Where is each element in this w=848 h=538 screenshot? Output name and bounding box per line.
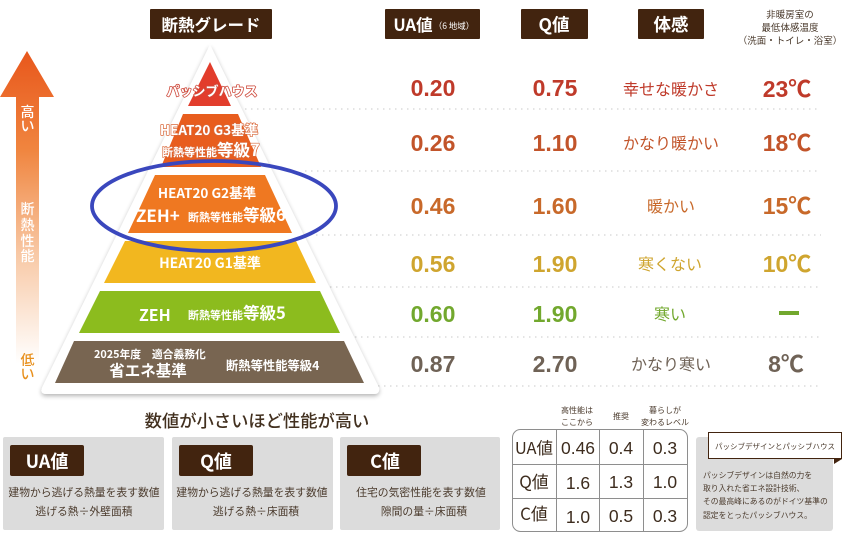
row: energy saving values: かなり寒い: [631, 351, 711, 375]
heading: sensation: [638, 9, 704, 39]
table: recommended values: 1.0: [653, 472, 677, 492]
row: passive house values: [411, 75, 811, 102]
heading: Q value: Q値: [539, 12, 569, 37]
panel: passive design note: 取り入れた省エネ設計技術、: [703, 483, 804, 493]
panel: passive design note: 認定をとったパッシブハウス。: [703, 510, 812, 520]
pyramid tier: HEAT20 G2 and ZEH+: HEAT20 G2基準: [158, 182, 256, 202]
table: recommended values: 1.0: [566, 507, 590, 527]
arrow label: insulation performance: 性: [20, 231, 34, 251]
pyramid tier: ZEH: ZEH: [139, 302, 171, 326]
heading: Q value: [521, 9, 588, 39]
table column headers: 変わるレベル: [641, 417, 689, 428]
arrow label: high: い: [20, 116, 34, 136]
heading: UA value: （6 地域）: [434, 20, 474, 32]
row: G3 values: [411, 130, 811, 156]
row: ZEH values: [411, 301, 799, 327]
heading: lowest sensible temperature: [738, 7, 842, 47]
pyramid tier: energy saving standard: 2025年度 適合義務化: [94, 346, 206, 362]
panel: passive design note: パッシブデザインは自然の力を: [703, 470, 812, 480]
row: G1 values: [411, 251, 811, 277]
row: ZEH values: 1.90: [533, 301, 577, 327]
pyramid tier: HEAT20 G2 and ZEH+: [128, 175, 292, 233]
panel: Q value: 建物から逃げる熱量を表す数値: [176, 484, 328, 500]
pyramid tier: energy saving standard: [55, 341, 364, 383]
row: G2 values: 15℃: [763, 193, 811, 219]
row: G3 values: 1.10: [533, 130, 577, 156]
row: G2 values: 暖かい: [647, 193, 695, 217]
table column headers: ここから: [561, 417, 593, 428]
pyramid tier: passive house: [166, 62, 258, 106]
row: passive house values: 23℃: [763, 76, 811, 102]
panel: C value: C値: [370, 448, 400, 474]
row: passive house values: 0.75: [533, 75, 578, 101]
row: energy saving values: 8℃: [768, 351, 804, 377]
pyramid tier: passive house: パッシブハウス: [166, 81, 258, 100]
table column headers: [561, 405, 689, 428]
row: energy saving values: 0.87: [411, 351, 455, 377]
panel: Q value: Q値: [200, 448, 232, 474]
row: G1 values: 1.90: [533, 251, 577, 277]
heading: insulation grade: 断熱グレード: [162, 12, 260, 36]
pyramid tier: energy saving standard: 省エネ基準: [109, 359, 187, 381]
arrow label: low: い: [20, 364, 34, 384]
table: recommended values: 0.4: [609, 438, 633, 458]
row: ZEH values: 0.60: [411, 301, 455, 327]
pyramid tier: HEAT20 G3: [160, 114, 261, 167]
row: passive house values: 0.20: [411, 75, 455, 101]
table: recommended values: 0.46: [561, 438, 595, 458]
row: G1 values: 寒くない: [638, 251, 702, 275]
panel: C value: 住宅の気密性能を表す数値: [356, 484, 486, 500]
panel: UA value: [3, 437, 164, 530]
table column headers: 高性能は: [561, 405, 593, 416]
table: recommended values: 1.6: [566, 473, 590, 493]
arrow: high to low insulation performance: [0, 51, 54, 384]
row: G1 values: 10℃: [763, 251, 811, 277]
panel: C value: [340, 437, 500, 530]
pyramid tier: HEAT20 G3: HEAT20 G3基準: [160, 119, 258, 139]
pyramid tier: HEAT20 G3: 断熱等性能等級7: [162, 137, 260, 161]
panel: UA value: 逃げる熱÷外壁面積: [35, 503, 133, 519]
row: G2 values: 1.60: [533, 193, 577, 219]
table: recommended values: 0.3: [653, 506, 677, 526]
row: G2 values: 0.46: [411, 193, 455, 219]
row: passive house values: 幸せな暖かさ: [623, 76, 719, 100]
heading: lowest sensible temperature: 最低体感温度: [761, 20, 819, 34]
pyramid tier: HEAT20 G1: [104, 241, 316, 283]
pyramid tier: HEAT20 G1: HEAT20 G1基準: [159, 253, 261, 273]
table: recommended values: Q値: [519, 468, 549, 493]
pyramid tier: ZEH: 断熱等性能等級5: [188, 300, 286, 324]
table column headers: 推奨: [613, 411, 629, 422]
panel: passive design note: その最高峰にあるのがドイツ基準の: [703, 496, 828, 506]
panel: passive design note: パッシブデザインとパッシブハウス: [715, 441, 835, 452]
row: ZEH values: 寒い: [654, 301, 686, 325]
panel: Q value: [172, 437, 333, 530]
panel: C value: 隙間の量÷床面積: [381, 503, 467, 519]
panel: UA value: UA値: [26, 448, 68, 474]
pyramid tier: HEAT20 G2 and ZEH+: 断熱等性能等級6: [188, 202, 286, 226]
pyramid tier: energy saving standard: 断熱等性能等級4: [226, 356, 319, 374]
heading: smaller is better: 数値が小さいほど性能が高い: [145, 407, 369, 432]
row: G3 values: 0.26: [411, 130, 455, 156]
panel: Q value: 逃げる熱÷床面積: [213, 503, 299, 519]
pyramid backing: [42, 47, 378, 393]
heading: lowest sensible temperature: （洗面・トイレ・浴室）: [738, 33, 842, 47]
highlight ellipse: [92, 161, 336, 251]
table: recommended values: 0.3: [653, 438, 677, 458]
arrow label: low: 低: [20, 350, 34, 370]
panel: UA value: 建物から逃げる熱量を表す数値: [8, 484, 160, 500]
row: G2 values: [411, 193, 811, 219]
arrow label: insulation performance: 熱: [20, 215, 34, 235]
table: recommended values: UA値: [515, 435, 553, 459]
table: recommended values: [512, 405, 689, 532]
row: energy saving values: [411, 351, 804, 377]
heading: UA value: UA値: [393, 12, 433, 36]
panel: passive design note: [696, 432, 842, 531]
arrow label: high: 高: [20, 102, 34, 122]
row: G3 values: かなり暖かい: [623, 130, 719, 154]
table: recommended values: 0.5: [609, 506, 633, 526]
arrow label: insulation performance: 断: [20, 199, 34, 219]
heading: insulation grade: [150, 9, 272, 39]
table column headers: 暮らしが: [649, 405, 681, 416]
heading: sensation: 体感: [654, 12, 688, 37]
pyramid tier: HEAT20 G2 and ZEH+: ZEH+: [136, 202, 180, 227]
row: G1 values: 0.56: [411, 251, 455, 277]
table: recommended values: 1.3: [609, 472, 633, 492]
pyramid tier: ZEH: [79, 291, 340, 333]
row: energy saving values: 2.70: [533, 351, 577, 377]
row: G3 values: 18℃: [763, 130, 811, 156]
heading: lowest sensible temperature: 非暖房室の: [766, 7, 814, 21]
arrow label: insulation performance: 能: [20, 246, 34, 266]
table: recommended values: C値: [520, 500, 548, 525]
heading: UA value: [385, 9, 480, 39]
